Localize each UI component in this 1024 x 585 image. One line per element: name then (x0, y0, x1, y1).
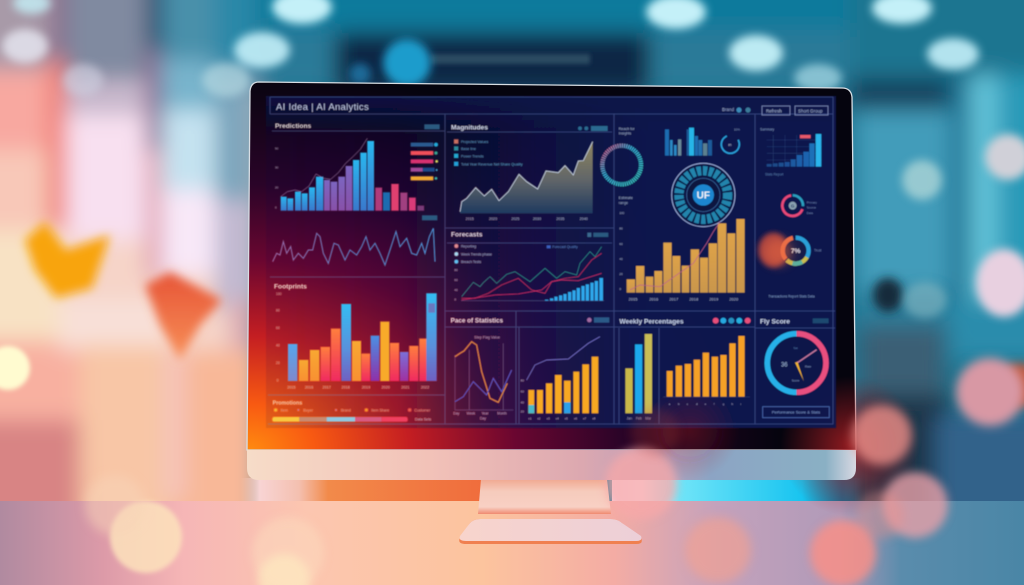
blurred person (873, 278, 903, 312)
donut chart: multi colour with percentage (777, 232, 822, 269)
text: chart caption: Estimate (619, 196, 633, 200)
bright bokeh at left (0, 346, 30, 390)
promotions legend: Brand (341, 408, 351, 412)
heading: forecasts: Forecasts (451, 232, 483, 239)
gauge: Rate (805, 364, 812, 368)
panel: weekly percentages and gauge (619, 318, 829, 421)
orange chart axis labels: 60 (619, 242, 623, 246)
panel: predictions bar chart (273, 123, 440, 265)
orange bars (663, 336, 750, 406)
panel: footprints bar chart: 2018 (342, 386, 350, 390)
forecast legend: Week Trends phase (461, 252, 492, 256)
panel: top right visual column: 2020 (729, 297, 739, 302)
orange bars: c (687, 402, 689, 406)
bars (281, 141, 424, 211)
legend squares: Power Trends (461, 154, 484, 158)
panel: top right visual column (602, 127, 822, 302)
orange bars with line: 80 (521, 379, 524, 383)
orange bars with line (521, 337, 600, 420)
promotions legend: Item Share (371, 408, 389, 412)
heading: promotions: Promotions (273, 400, 302, 406)
text: caption: Reach for (619, 127, 635, 131)
axis labels: 30 (275, 165, 279, 169)
orange bars with line: x1 (528, 416, 532, 420)
orange bars: d (696, 402, 698, 406)
monitor bezel (247, 82, 920, 516)
orange chart axis labels: 40 (619, 257, 623, 261)
heading: weekly percentages: Weekly Percentages (619, 318, 684, 325)
axis labels: 60 (276, 326, 280, 330)
panel: footprints bar chart: 2019 (362, 386, 370, 390)
forecast lines (462, 247, 602, 297)
wheel label: UF (697, 191, 710, 202)
top centre sign (255, 0, 875, 30)
panel: top right visual column: 2016 (649, 297, 659, 302)
horizontal legend bars (411, 143, 438, 180)
monitor stand (459, 479, 642, 544)
small gauge (718, 128, 743, 157)
orange chart axis labels: 80 (619, 226, 623, 230)
donut chart: pink and teal: Primary (807, 201, 817, 205)
button: Performance Score & Stats (772, 410, 820, 415)
heading: footprints: Footprints (274, 283, 307, 290)
blurred orange plant (25, 222, 110, 298)
tall bars: Jan (627, 417, 632, 421)
donut chart: multi colour with percentage: Trust (814, 248, 822, 252)
legend squares: Total Year Revenue Net Share Quality (461, 162, 523, 166)
orange chart axis labels: 0 (619, 287, 621, 291)
mini bar chart: Stats Report (765, 172, 784, 176)
orange bars with line: x8 (592, 416, 596, 420)
gauge: 36 (781, 362, 788, 368)
donut chart: pink and teal: Source (807, 206, 816, 210)
legend squares: Base line (461, 147, 476, 151)
monitor base (459, 519, 642, 544)
curve chart: Month (497, 411, 507, 415)
background bokeh lights (2, 0, 1024, 318)
donut chart: pink and teal: Data (807, 211, 813, 215)
forecast axis: 80 (454, 268, 458, 272)
orange bars: i (740, 402, 741, 406)
small gauge: 10% (734, 128, 740, 132)
forecast legend: Breach Tests (461, 260, 481, 264)
orange bars: h (731, 402, 733, 406)
heading: fly score: Fly Score (760, 318, 790, 325)
curve chart: Year (482, 411, 489, 415)
area chart (460, 142, 593, 213)
orange bars with line: x2 (537, 416, 541, 420)
panel: top right visual column: 2019 (709, 297, 719, 302)
dashboard screen (266, 96, 836, 480)
legend squares (454, 139, 523, 166)
orange bars with line: 60 (521, 390, 524, 394)
x axis labels: 2025 (511, 217, 519, 221)
orange bars: e (705, 402, 707, 406)
line chart: waveform (273, 228, 435, 265)
monitor chin (247, 450, 856, 480)
axis labels: 40 (276, 343, 280, 347)
panel: top right visual column: 2015 (629, 297, 638, 302)
axis labels: 100 (276, 292, 282, 296)
button (763, 407, 829, 418)
panel: top right visual column: range (619, 201, 628, 205)
x axis labels: 2030 (533, 217, 541, 221)
axis labels: 80 (276, 309, 280, 313)
gauge needles (796, 350, 817, 364)
top toolbar buttons (722, 106, 828, 115)
promotions legend: Buyer (303, 408, 314, 412)
axis labels: 20 (275, 186, 279, 190)
orange chart axis labels: 100 (619, 211, 625, 215)
x axis labels: 2015 (466, 217, 474, 221)
orange band behind stand (240, 478, 485, 502)
forecast blue bars (545, 278, 603, 301)
left columns (0, 0, 52, 70)
orange bar chart (627, 219, 745, 293)
axis labels: 20 (276, 361, 280, 365)
panel: footprints bar chart (272, 283, 609, 422)
bars (288, 293, 437, 381)
small blue bars (665, 128, 712, 156)
axis labels: 0 (277, 379, 279, 383)
x axis labels: 2035 (556, 217, 564, 221)
orange chart line (630, 222, 720, 290)
orange bars with line: x6 (574, 416, 577, 420)
orange bars: f (714, 402, 715, 406)
gauge: Sat (793, 346, 798, 350)
panel: footprints bar chart: 2021 (401, 386, 409, 390)
gauge: Score (792, 379, 800, 383)
promotions legend: Item (281, 408, 288, 412)
tall bars: Mar (645, 417, 652, 421)
curve chart (453, 335, 513, 421)
forecast legend (454, 244, 578, 264)
heading: predictions: Predictions (275, 123, 312, 130)
forecast legend: Reporting (461, 244, 476, 248)
donut chart: pink and teal: G (791, 203, 795, 208)
left lower furniture (0, 340, 80, 420)
legend squares: Projected Values (461, 140, 489, 144)
desk surface (0, 501, 1024, 585)
stacked progress bar: Data Sets (415, 418, 431, 422)
gauge (767, 334, 826, 392)
panel: top right visual column: 2018 (689, 297, 699, 302)
donut chart: pink and teal (779, 192, 817, 219)
stacked progress bar (272, 417, 431, 422)
x axis labels (466, 217, 588, 221)
mini bar chart (760, 128, 822, 176)
curve chart: Week (467, 411, 475, 415)
curve chart: Day (453, 411, 460, 415)
orange bars: b (678, 402, 680, 406)
panel: top right visual column: Insights (619, 131, 631, 135)
radial wheel (672, 163, 735, 227)
forecast axis (454, 268, 458, 302)
forecast axis: 40 (454, 288, 458, 292)
forecast axis: 60 (454, 278, 458, 282)
blurred text on sign (430, 54, 590, 64)
orange bars: a (669, 402, 671, 406)
panel: footprints bar chart: 2016 (305, 386, 313, 390)
x axis labels: 2020 (489, 217, 497, 221)
curve chart: Step Flag Value (474, 335, 500, 339)
orange chart axis labels: 20 (619, 272, 623, 276)
orange bars with line: x7 (583, 416, 586, 420)
orange bars with line: 20 (521, 410, 524, 414)
orange bars with line: x5 (565, 416, 568, 420)
panel: magnitudes area chart and forecast line chart (451, 125, 608, 302)
dashed ring (602, 146, 641, 184)
top toolbar buttons: Short Group (798, 108, 823, 114)
curve chart: Day (480, 417, 486, 421)
dashboard panel grid lines (268, 97, 835, 424)
blurred red plant (145, 272, 222, 360)
orange chart axis labels (619, 211, 625, 291)
panel: top right visual column: 2017 (669, 297, 679, 302)
promotions legend (274, 408, 431, 412)
panel: footprints bar chart: 2017 (323, 386, 331, 390)
top toolbar buttons: Brand (722, 107, 735, 112)
axis labels (275, 146, 279, 210)
axis labels: 50 (275, 146, 279, 150)
right room (850, 0, 1024, 80)
orange bars with line: x4 (556, 416, 559, 420)
x axis labels: 2040 (580, 217, 588, 221)
panel: footprints bar chart: 2020 (382, 386, 390, 390)
top toolbar buttons: Refresh (766, 108, 782, 114)
text: report note: Transactions Report Stats Data (768, 294, 815, 298)
orange bars with line: 40 (521, 400, 524, 404)
trend line over bars (281, 138, 367, 197)
glow behind second donut (758, 233, 788, 267)
donut chart: multi colour with percentage: 7% (791, 248, 801, 255)
cyan band behind stand (612, 478, 862, 502)
forecast axis: 0 (454, 298, 456, 302)
orange bars: g (723, 402, 725, 406)
orange bars with line: x3 (547, 416, 550, 420)
small gauge: m (728, 143, 731, 147)
promotions legend: Customer (414, 408, 431, 412)
foreground bokeh circles (85, 238, 948, 585)
panel: footprints bar chart: 2022 (421, 386, 429, 390)
heading: pace of statistics: Pace of Statistics (451, 318, 504, 325)
dashboard title: AI Idea | AI Analytics (276, 102, 369, 113)
forecast legend: Forecast Quality (552, 245, 578, 249)
axis labels: 0 (275, 206, 277, 210)
axis labels (276, 292, 282, 383)
tall bars (625, 334, 652, 421)
panel: footprints bar chart: 2015 (287, 386, 295, 390)
mini bar chart: Summary (760, 128, 775, 132)
status dots (713, 318, 751, 324)
heading: magnitudes: Magnitudes (451, 125, 488, 132)
tall bars: Feb (636, 417, 642, 421)
